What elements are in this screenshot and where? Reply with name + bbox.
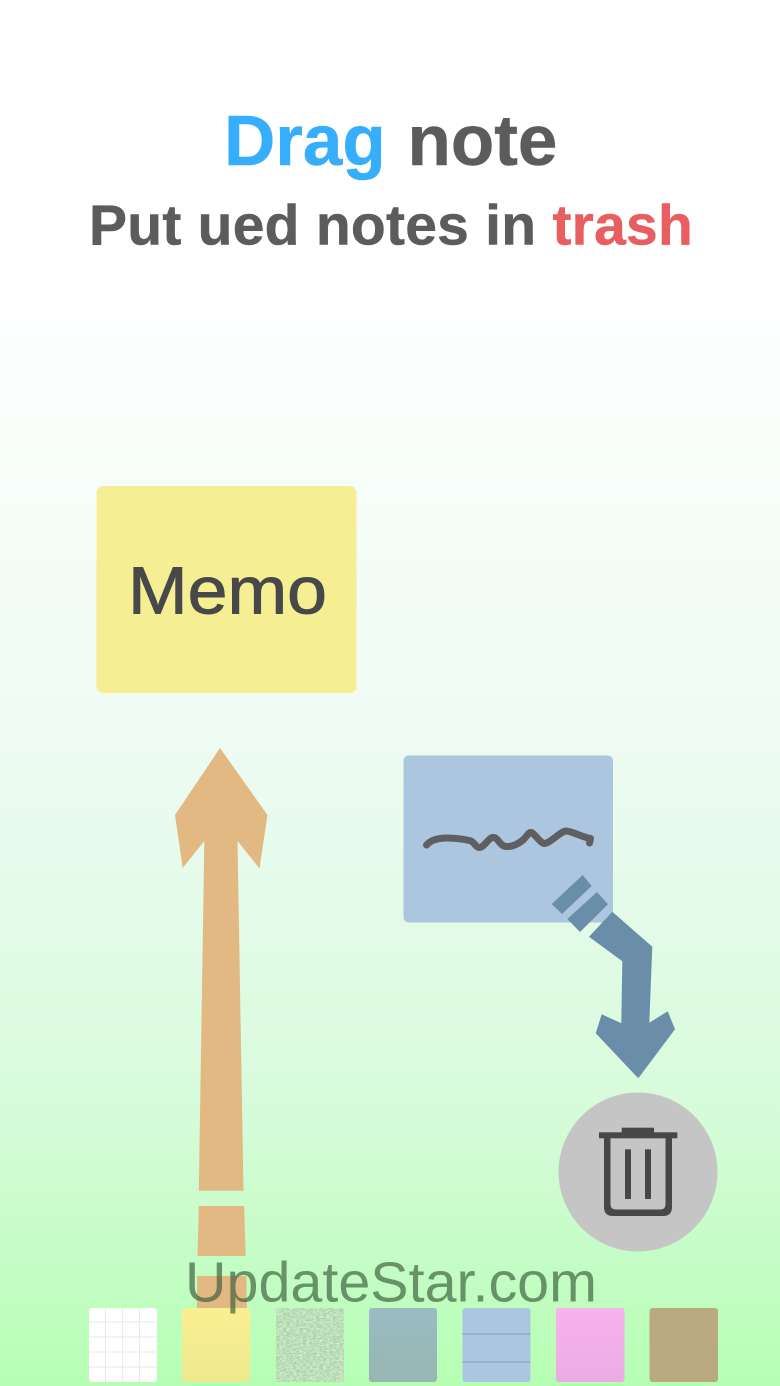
- swatch: yellow: [182, 1308, 250, 1382]
- swatch: teal: [369, 1308, 437, 1382]
- subtitle: Put ued notes in trash: Put ued notes in trash: [89, 194, 693, 258]
- swatch: tan: [650, 1308, 718, 1382]
- swatch: blue lined: [462, 1308, 530, 1382]
- watermark: UpdateStar.com: [185, 1250, 597, 1314]
- memo label: Memo: [128, 553, 327, 628]
- handwritten scribble: [426, 831, 590, 848]
- swatch: white grid: [89, 1308, 157, 1382]
- swatch: green texture: [276, 1308, 344, 1382]
- swatch: pink: [556, 1308, 624, 1382]
- note swatches row: [89, 1308, 718, 1382]
- blue arrow to trash: [552, 875, 675, 1078]
- title: Drag note: Drag note: [224, 102, 557, 181]
- blue handwritten note: [404, 756, 613, 922]
- trash button: [558, 1092, 718, 1252]
- orange arrow pointing up: [175, 748, 268, 1308]
- yellow memo note: [96, 486, 356, 693]
- icon: trash can: [599, 1128, 677, 1216]
